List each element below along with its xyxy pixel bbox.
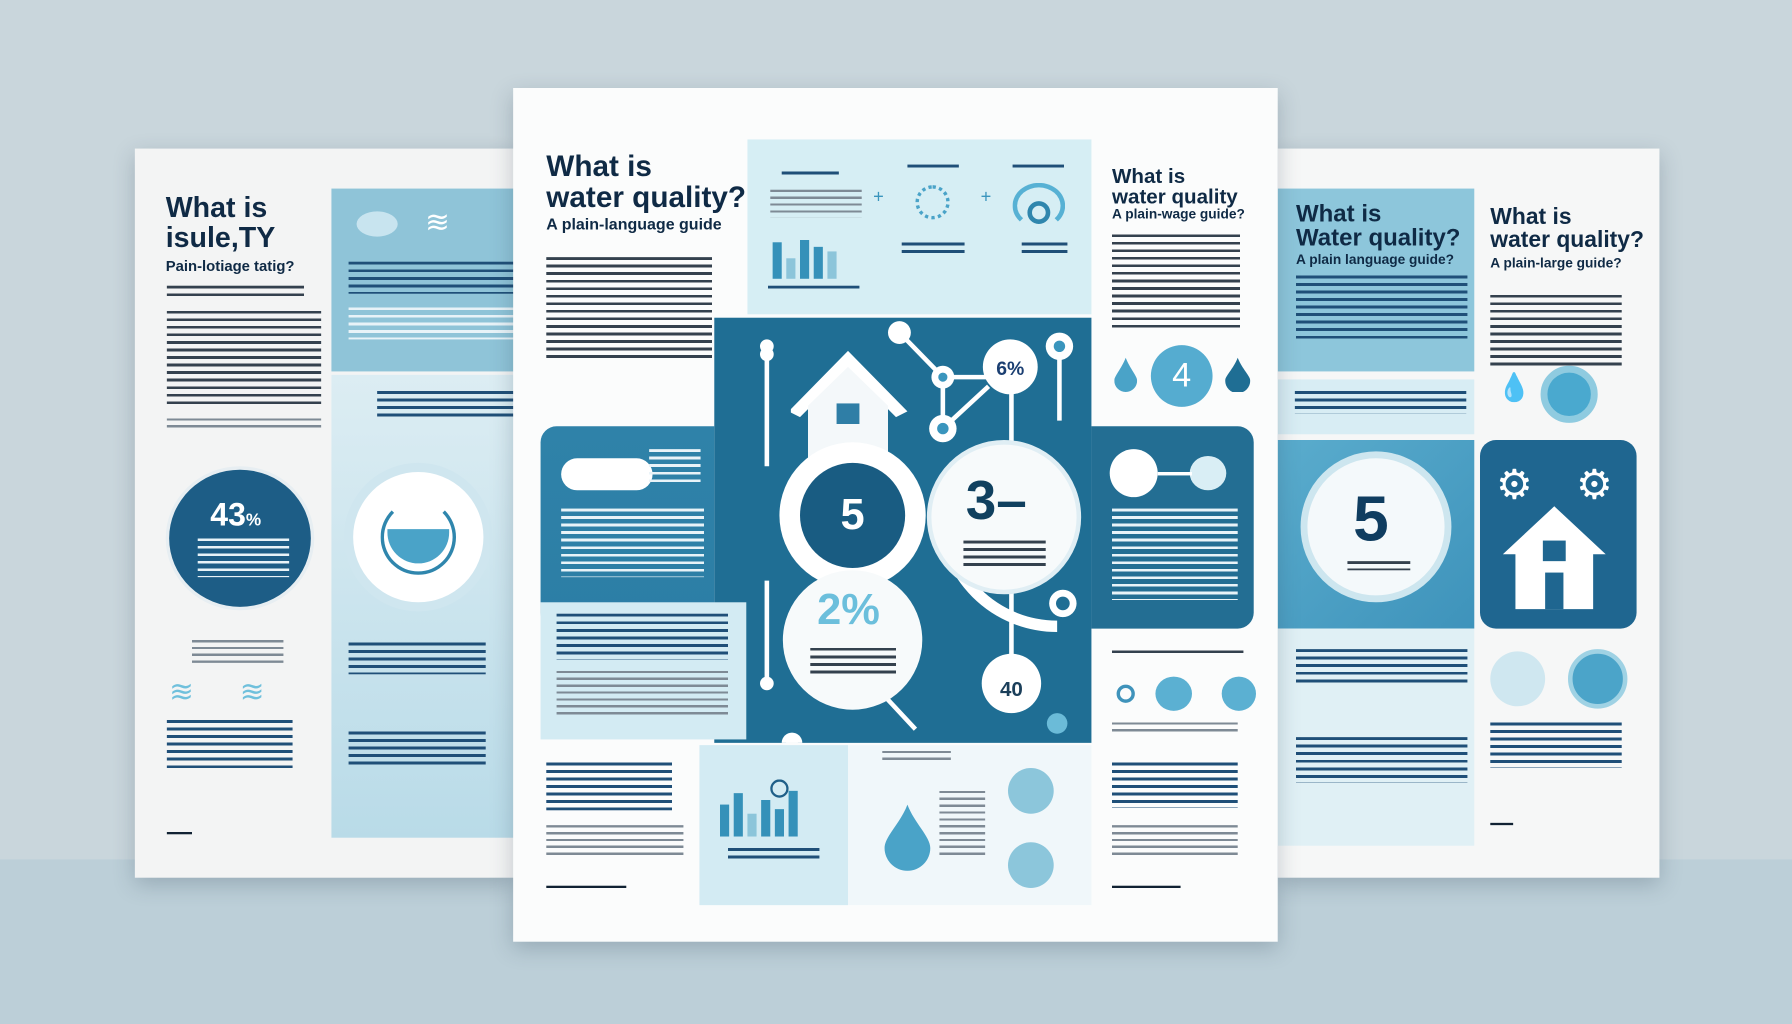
right blue title panel: Water quality? xyxy=(1296,226,1460,252)
right blue title panel: A plain language guide? xyxy=(1296,251,1454,267)
house icon xyxy=(790,351,908,458)
wave icon xyxy=(169,640,310,709)
left top blue panel: ≋ xyxy=(425,205,450,239)
2% circle: 2% xyxy=(817,586,880,634)
drop icons: 💧 xyxy=(1497,373,1531,403)
right second title xyxy=(1490,205,1644,253)
bottom panels xyxy=(699,745,848,905)
dark house panel: ⚙ xyxy=(1576,461,1613,507)
left title: isule,TY xyxy=(166,221,275,253)
right column title: water quality xyxy=(1112,186,1238,208)
4 circle and drops: 4 xyxy=(1172,357,1191,394)
left top blue panel xyxy=(331,189,517,371)
right second title: water quality? xyxy=(1490,228,1644,253)
bottom left text xyxy=(546,762,672,810)
icons xyxy=(915,185,950,219)
5 circle: 5 xyxy=(840,491,865,539)
network diagram xyxy=(760,321,1077,743)
right blue title panel xyxy=(1278,189,1474,371)
bar chart xyxy=(772,240,837,279)
central dark panel xyxy=(714,318,1091,743)
43% circle: 43% xyxy=(210,497,261,533)
2% circle xyxy=(783,570,922,710)
right drop circles xyxy=(1490,651,1545,706)
dark house panel: ⚙ xyxy=(1496,461,1533,507)
dark house panel xyxy=(1480,440,1637,629)
left subtitle: Pain-lotiage tatig? xyxy=(166,257,294,274)
6% circle xyxy=(983,339,1038,394)
3- circle xyxy=(927,440,1081,594)
6% circle: 6% xyxy=(996,358,1024,379)
5 circle: 5 xyxy=(1353,482,1389,554)
3- circle: 3– xyxy=(966,471,1027,531)
right column title: What is xyxy=(1112,165,1185,187)
left text block xyxy=(167,286,304,299)
right lower light panel xyxy=(1278,629,1474,846)
left title: What is xyxy=(166,192,267,224)
top light panel: + xyxy=(981,187,991,207)
center sheet: A plain-wage guide? xyxy=(1112,206,1245,222)
center title: water quality? xyxy=(546,179,746,213)
center sheet xyxy=(513,88,1278,942)
right sheet xyxy=(1278,149,1659,878)
right lower icons xyxy=(1117,685,1135,703)
left light panel xyxy=(331,375,517,838)
right blue panel xyxy=(1278,440,1474,629)
center title xyxy=(546,149,746,213)
top light panel: + xyxy=(873,187,884,207)
4 circle and drops xyxy=(1151,345,1213,407)
right sheet: A plain-large guide? xyxy=(1490,255,1622,271)
40 circle xyxy=(982,654,1041,713)
43% circle xyxy=(166,466,314,610)
center intro text xyxy=(546,257,712,360)
right blue title panel: What is xyxy=(1296,201,1381,227)
floor background xyxy=(0,859,1792,1024)
center subtitle: A plain-language guide xyxy=(546,215,722,233)
wave circle icon xyxy=(344,463,493,611)
top light panel xyxy=(747,139,1091,314)
wave icon: ≋≋ xyxy=(169,674,310,709)
right second title: What is xyxy=(1490,205,1572,230)
5 circle xyxy=(779,442,926,589)
left bottom text xyxy=(167,720,293,773)
lower left light panel xyxy=(541,602,746,739)
center title: What is xyxy=(546,149,652,183)
right column title xyxy=(1112,165,1238,208)
40 circle: 40 xyxy=(1000,678,1023,701)
5 circle xyxy=(1301,451,1451,602)
right light panel xyxy=(1278,379,1474,434)
left sheet xyxy=(135,149,517,878)
left title xyxy=(166,192,275,253)
